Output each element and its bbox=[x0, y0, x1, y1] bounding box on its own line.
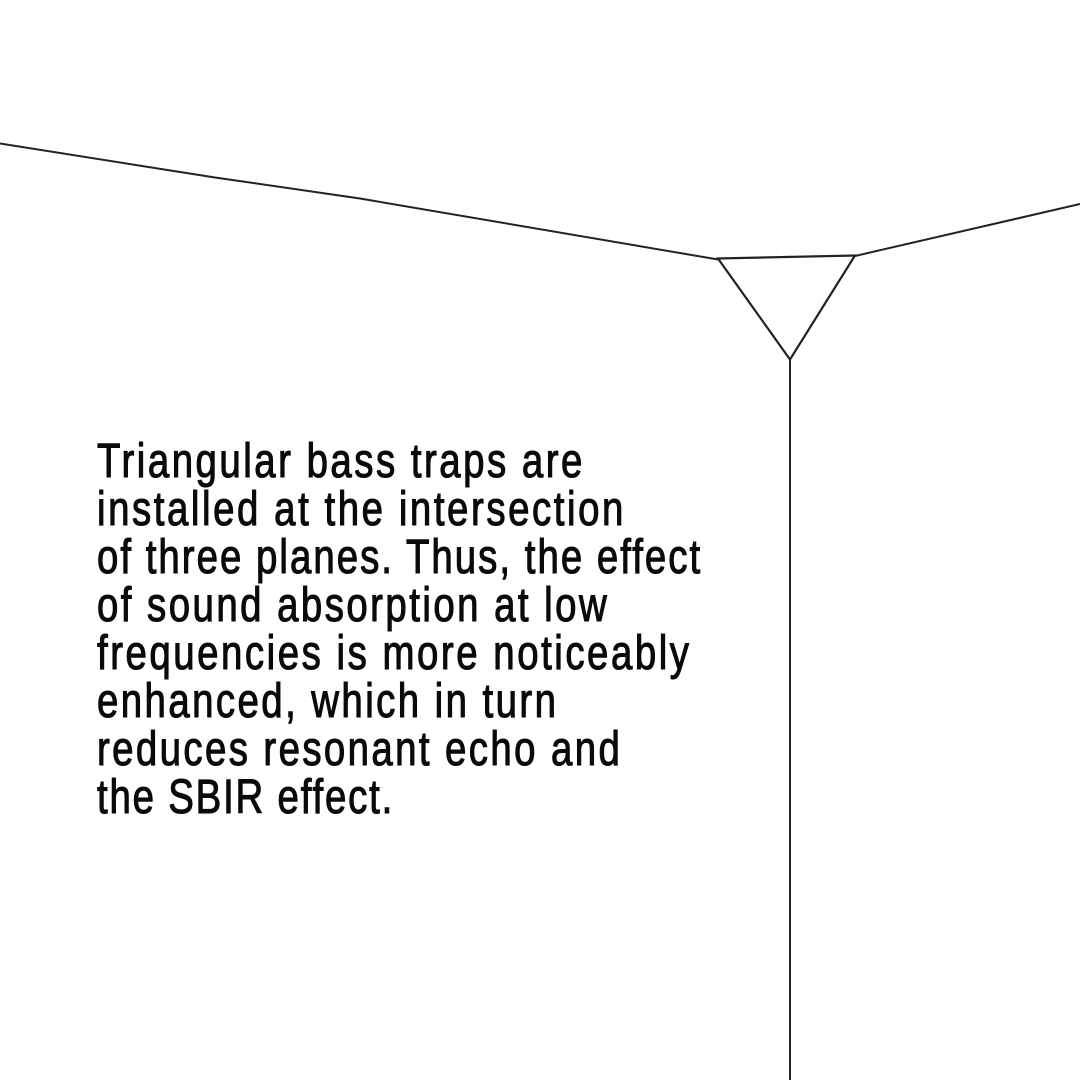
left ceiling edge bbox=[0, 144, 718, 260]
body text: Triangular bass traps are bbox=[97, 435, 585, 488]
body text bbox=[97, 435, 702, 824]
body text: installed at the intersection bbox=[97, 483, 626, 536]
body text: frequencies is more noticeably bbox=[97, 627, 692, 680]
vertical wall corner bbox=[789, 359, 791, 1080]
body text: reduces resonant echo and bbox=[97, 723, 622, 776]
body text: of sound absorption at low bbox=[97, 579, 609, 632]
body text: enhanced, which in turn bbox=[97, 675, 558, 728]
right ceiling edge bbox=[855, 204, 1080, 256]
body text: the SBIR effect. bbox=[97, 771, 394, 824]
body text: of three planes. Thus, the effect bbox=[97, 531, 702, 584]
triangular bass trap bbox=[718, 256, 855, 360]
